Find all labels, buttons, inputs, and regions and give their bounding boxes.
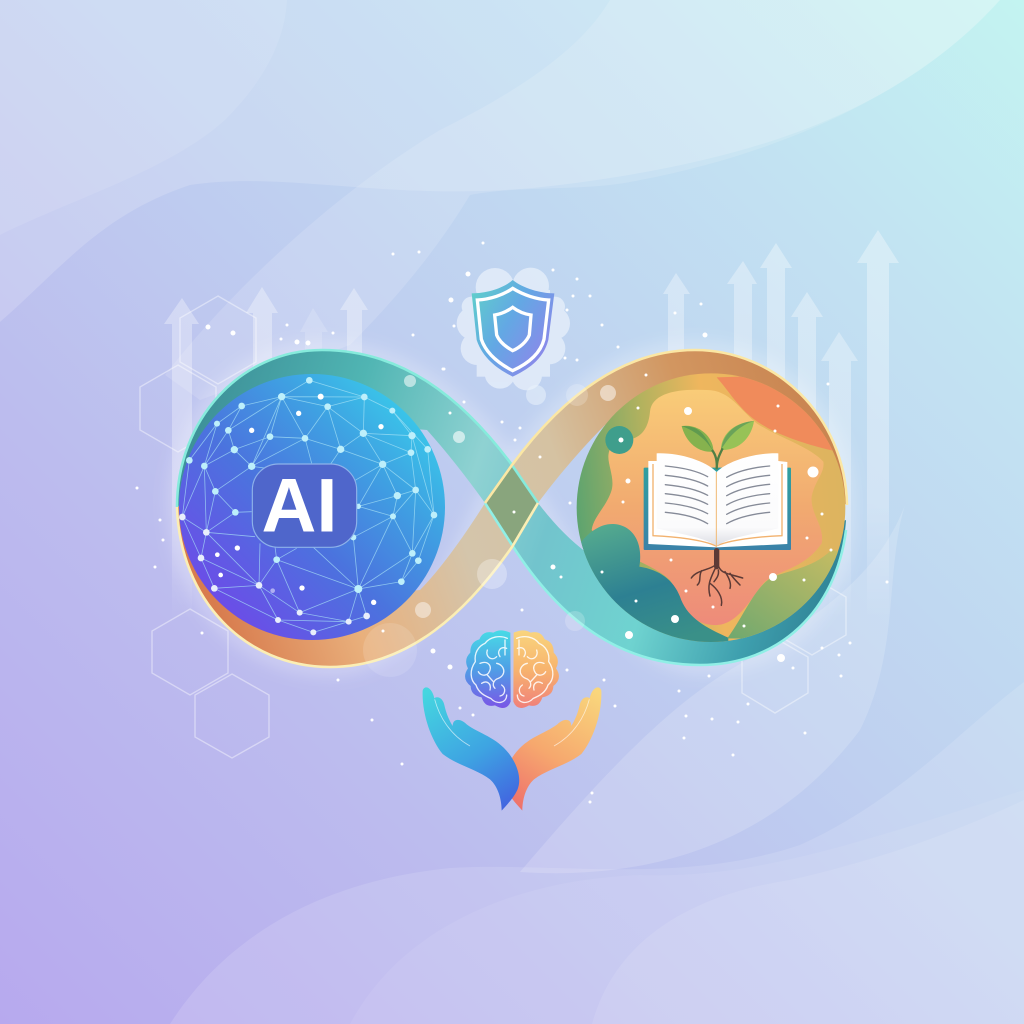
infinity ribbon: [177, 350, 847, 667]
open book: [644, 453, 791, 550]
small teal circle: [605, 426, 633, 454]
roots: [691, 551, 743, 605]
left hand: [423, 687, 519, 811]
ribbon band: orange lower left to upper right: [177, 350, 847, 667]
ribbon band: teal upper left to lower right: [177, 350, 846, 665]
hexagon outlines: [140, 296, 846, 758]
thought bubble below shield: [526, 385, 546, 405]
lower left teal blob: [581, 524, 728, 642]
orange top right blob: [717, 376, 832, 450]
ribbon edge highlights: [177, 350, 847, 667]
growth arrows, left: [164, 287, 368, 620]
shield in cloud: [457, 268, 570, 390]
brain folds left: [471, 637, 507, 702]
AI label: AI: [262, 464, 338, 549]
lower right green blob: [728, 550, 838, 639]
sparkle dots: [137, 243, 887, 802]
circle base: [577, 373, 845, 642]
AI badge: [252, 464, 357, 547]
brain and hands: [423, 630, 601, 811]
translucent bubbles on ribbon: [363, 375, 616, 677]
cloud: [457, 268, 570, 390]
brain folds right: [517, 637, 553, 702]
ribbon crossing: [485, 465, 538, 547]
sprout: [682, 421, 754, 469]
growth arrows, right: [663, 230, 899, 620]
brain left hemisphere: [465, 630, 511, 708]
shield: [472, 280, 554, 377]
finger lines: [435, 699, 589, 746]
right hand: [505, 687, 601, 811]
brain right hemisphere: [513, 630, 559, 708]
network lines and nodes: [179, 377, 437, 635]
book and sprout circle: [576, 373, 846, 642]
AI network sphere: [179, 374, 445, 640]
central peach blob: [592, 390, 824, 625]
ribbon glow: [177, 350, 846, 667]
